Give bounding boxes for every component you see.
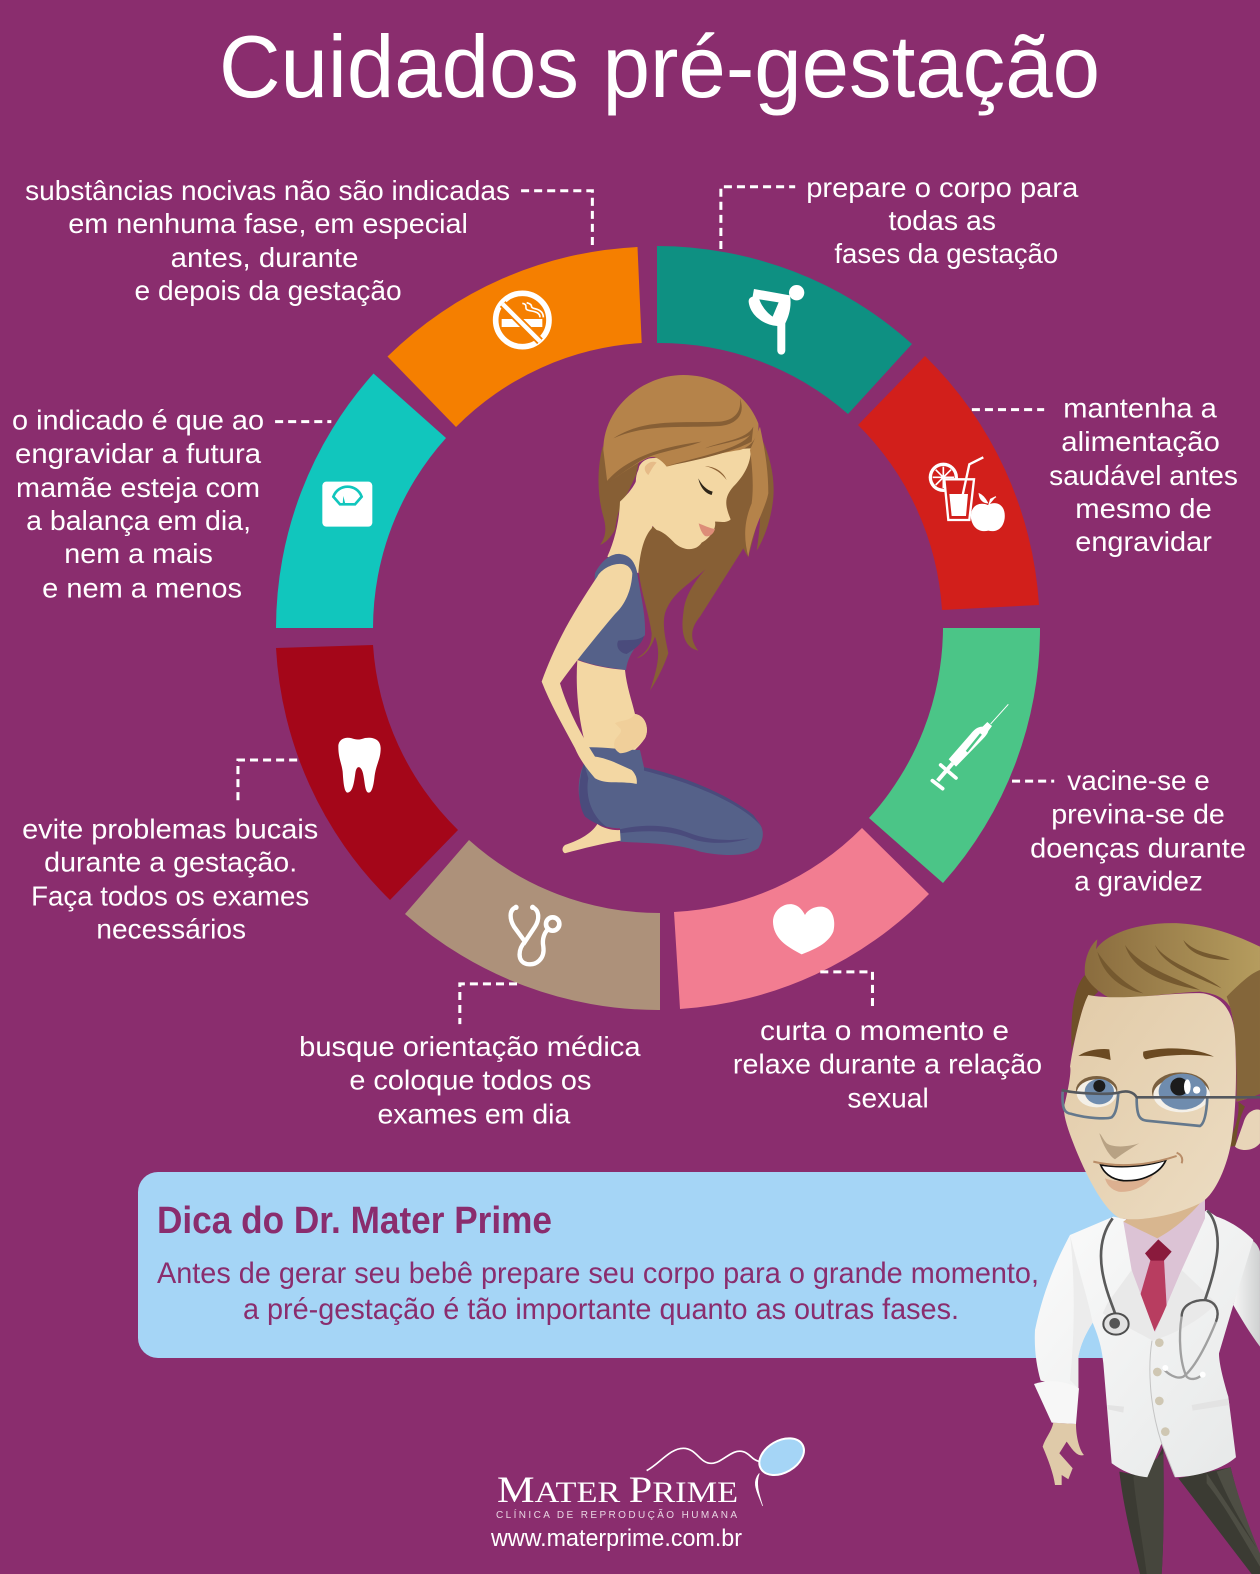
logo [490,1431,810,1552]
stethoscope [1101,1211,1218,1379]
text: curta o momento: curta o momento e [760,1015,1009,1046]
text: problemas bucais: necessários [96,914,246,945]
segment: green [869,628,1040,883]
pupils [1093,1080,1105,1092]
text: substâncias nocivas: e depois da gestação [135,275,402,306]
hair [1085,923,1260,1102]
text: substâncias nocivas: em nenhuma fase, em especial [68,208,468,239]
nose [1099,1133,1139,1159]
buttons [1153,1338,1170,1436]
icon: weighing scale [322,482,372,527]
text: substâncias nocivas: substâncias nocivas não são indicadas [25,175,510,206]
top garment [577,554,645,670]
logo name: MATER PRIME [497,1470,738,1511]
coat [1035,1210,1253,1477]
coat seam [1150,1341,1175,1477]
text: alimentação saudável: engravidar [1075,526,1212,557]
back arm and hand [542,564,637,784]
text: orientação médica: e coloque todos os [349,1064,591,1095]
lapel shadow [1103,1270,1217,1341]
text: vacine-se: vacine-se e [1067,765,1210,796]
hair back [1071,975,1098,1050]
tie knot [1145,1239,1172,1261]
text: vacine-se: previna-se de [1051,798,1225,829]
text: problemas bucais: evite problemas bucais [22,813,318,844]
tip text: Antes de gerar seu bebê prepare seu corpo para o grande momento, [157,1257,1039,1290]
icon: no smoking [496,293,549,347]
belly [577,660,647,750]
title: Cuidados pré-gestação [219,17,1100,116]
tip panel [138,1172,1123,1358]
front hair dark strand [745,427,768,557]
icon: stethoscope [511,905,559,964]
eyelashes [698,478,713,495]
segment: orange [388,247,642,427]
glasses [1062,1090,1260,1126]
text: alimentação saudável: saudável antes [1049,460,1238,491]
tip text [157,1257,1039,1326]
doctor illustration [1034,923,1260,1574]
leg and trousers [579,747,763,855]
text: balança em dia: engravidar a futura [15,438,261,469]
neck [1123,1197,1205,1238]
text: balança em dia: o indicado é que ao [12,405,264,436]
irises [1085,1079,1114,1104]
back hair [637,423,774,691]
icon: heart [773,904,834,954]
left sleeve shadow [1070,1235,1093,1388]
text: orientação médica: exames em dia [378,1098,571,1129]
doctor body [1034,1197,1260,1574]
tip heading: Dica do Dr. Mater Prime [157,1200,552,1242]
text: vacine-se [1030,765,1246,897]
connector lines [238,187,1054,1024]
segment: cyan [276,374,446,628]
icon: yoga figure [749,285,804,355]
trousers [1119,1447,1164,1574]
woman illustration [542,375,774,855]
icon: syringe [932,704,1008,789]
segment: red [858,356,1039,610]
text: balança em dia: e nem a menos [42,572,242,603]
eyebrow [705,466,727,480]
text: orientação médica [299,1031,641,1129]
upper hand [614,714,647,753]
text: alimentação saudável: alimentação [1061,426,1220,457]
text: vacine-se: doenças durante [1030,832,1246,863]
text: orientação médica: busque orientação médica [299,1031,641,1062]
logo tagline: CLÍNICA DE REPRODUÇÃO HUMANA [496,1508,737,1521]
logo mark: sperm line [647,1431,810,1506]
shirt [1123,1197,1205,1333]
text: prepare o corpo: prepare o corpo para [806,172,1079,203]
ear [1235,1109,1260,1150]
text: problemas bucais [22,813,318,945]
text: substâncias nocivas [25,175,510,306]
website: www.materprime.com.br [490,1525,742,1552]
icon: juice and apple [929,457,1005,531]
segment: teal [657,246,912,414]
ear [638,458,660,483]
text: problemas bucais: durante a gestação. [44,846,297,877]
hand [1043,1423,1084,1485]
ring of eight care segments [276,246,1040,1010]
teeth [1101,1160,1166,1181]
text: balança em dia [12,405,264,603]
face [1064,993,1236,1219]
left back hair [598,443,640,545]
lower lip [1105,1175,1153,1192]
smile line [1093,1153,1182,1165]
hair shadows [605,398,753,483]
hair top [603,375,759,483]
eyebrows [1078,1048,1214,1060]
text: balança em dia: mamãe esteja com [16,472,260,503]
hair strands [1097,940,1230,993]
trousers shadows [579,763,763,843]
foot [562,824,621,853]
text: curta o momento [733,1015,1042,1113]
bra shadow [617,636,644,654]
text: prepare o corpo [806,172,1079,269]
text: curta o momento: sexual [847,1082,929,1113]
eye whites [1077,1079,1117,1107]
right sleeve [1233,1240,1260,1347]
text: prepare o corpo: todas as [889,205,996,236]
text: prepare o corpo: fases da gestação [834,238,1058,269]
icon: tooth [338,738,381,793]
pockets [1107,1398,1229,1413]
text: problemas bucais: Faça todos os exames [31,881,309,912]
text: alimentação saudável: mesmo de [1075,493,1212,524]
text: curta o momento: relaxe durante a relação [733,1048,1042,1079]
segment: dark red [276,645,458,900]
eye sockets [1076,1076,1117,1104]
text: alimentação saudável [1049,393,1238,557]
text: vacine-se: a gravidez [1074,866,1203,897]
cuff [1034,1381,1079,1424]
segment: pink [674,828,929,1009]
segment: tan [405,840,660,1010]
sideburn [1224,1102,1245,1147]
lips [699,523,715,536]
text: balança em dia: nem a mais [64,538,213,569]
face [636,448,751,549]
text: alimentação saudável: mantenha a [1063,393,1217,424]
hair lower right [1227,970,1260,1102]
text: balança em dia: a balança em dia, [26,505,251,536]
tie [1139,1259,1167,1332]
doctor head [1062,923,1260,1219]
tip text: a pré-gestação é tão importante quanto as outras fases. [243,1293,959,1326]
neck [607,478,660,573]
text: substâncias nocivas: antes, durante [171,242,358,273]
